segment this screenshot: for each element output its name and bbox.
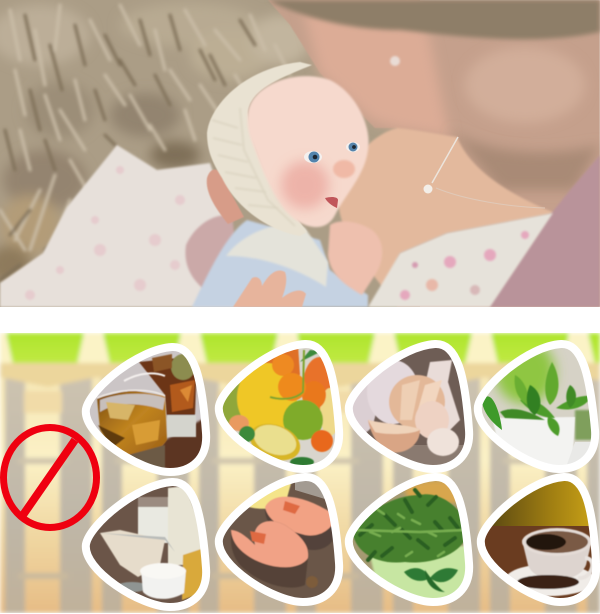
mother's lower fingers	[233, 271, 306, 307]
tile: cup of coffee	[477, 474, 600, 611]
dress floral dots	[400, 231, 529, 300]
tile: fresh herbs	[345, 474, 475, 609]
tile: dairy products	[80, 478, 215, 613]
blanket floral dots	[25, 166, 185, 300]
tile: citrus fruits	[215, 340, 345, 475]
front glass	[97, 373, 167, 468]
bonnet ribs	[212, 108, 295, 226]
baby's right eye	[346, 142, 360, 152]
baby's nose	[333, 160, 355, 178]
baby's left eye	[304, 151, 322, 163]
back glass	[139, 354, 197, 437]
mother's hand behind baby's head	[207, 170, 244, 224]
tile: garlic	[345, 340, 475, 475]
mother's hair	[268, 0, 600, 39]
baby's clothes	[192, 220, 368, 307]
baby's mouth	[325, 197, 338, 208]
necklace	[424, 137, 545, 208]
mother's neck and face	[268, 0, 600, 307]
baby's face	[247, 76, 369, 227]
room background	[0, 333, 600, 613]
tile: mint in white cup	[474, 340, 600, 475]
hay background	[0, 0, 420, 307]
mother's chest	[338, 128, 555, 290]
face side	[303, 16, 449, 134]
baby's bonnet	[207, 62, 312, 236]
mother's sweater	[488, 155, 600, 307]
lace collar	[226, 224, 328, 287]
light on neck	[465, 47, 585, 123]
earring	[390, 56, 400, 66]
tile: salmon steaks	[215, 474, 345, 609]
neck shadow	[460, 136, 600, 193]
baby's fist	[328, 221, 382, 295]
baby's cheek	[281, 161, 329, 209]
pink knit blanket	[185, 215, 235, 290]
tile: whisky and cola drinks	[80, 340, 215, 480]
panel: foods to avoid	[0, 333, 600, 613]
photo: mother breastfeeding baby	[0, 0, 600, 307]
icon: prohibition sign	[4, 428, 96, 528]
blanket	[0, 145, 240, 307]
floral dress	[368, 213, 553, 307]
